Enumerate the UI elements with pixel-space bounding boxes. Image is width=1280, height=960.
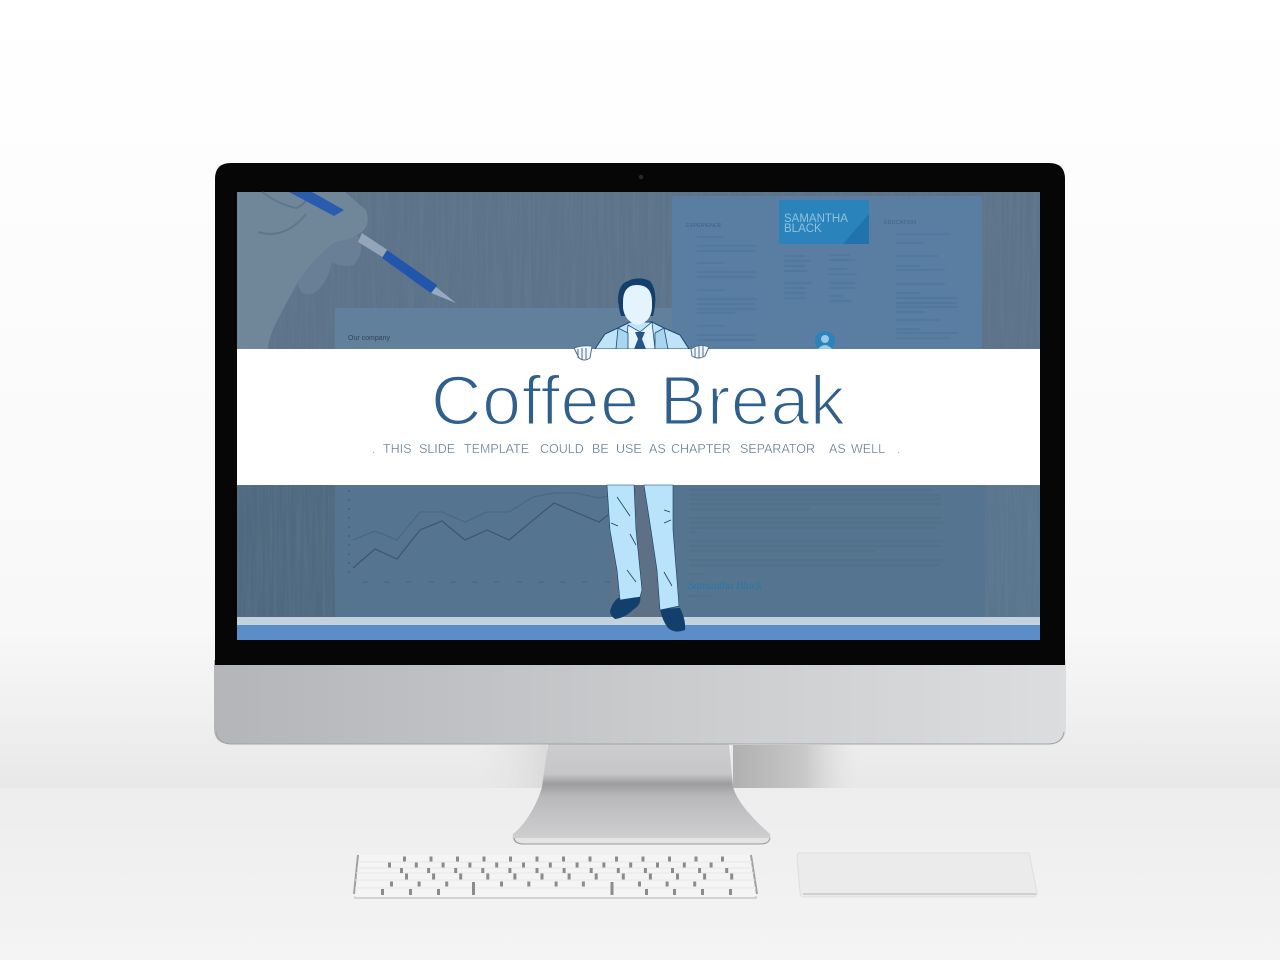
palm and thumb xyxy=(237,192,368,349)
key row lines xyxy=(355,862,756,888)
keyboard xyxy=(354,855,757,899)
signature: Samantha Black xyxy=(688,578,763,592)
shirt xyxy=(626,322,655,349)
jacket xyxy=(595,322,689,349)
hair xyxy=(618,278,655,316)
paper: letter lower xyxy=(673,485,985,617)
subtitle: SEPARATOR xyxy=(740,442,815,456)
monitor body xyxy=(214,163,1066,744)
resume blue name card: SAMANTHA xyxy=(784,213,848,225)
subtitle: . xyxy=(897,442,900,456)
subtitle: AS xyxy=(829,442,846,456)
avatar icon xyxy=(815,331,835,351)
paper: company report upper xyxy=(335,308,675,349)
pen xyxy=(289,192,344,216)
subtitle: TEMPLATE xyxy=(464,442,529,456)
webcam xyxy=(639,175,643,179)
wood lower left xyxy=(237,485,335,617)
resume blue name card xyxy=(779,200,869,244)
wood texture xyxy=(237,192,1040,349)
subtitle: SLIDE xyxy=(419,442,455,456)
line chart xyxy=(349,490,610,582)
resume paper: EDUCATION xyxy=(884,220,916,226)
subtitle: WELL xyxy=(851,442,885,456)
photo: hand holding pen xyxy=(237,192,456,349)
wood gap between papers xyxy=(634,485,673,617)
subtitle: COULD xyxy=(540,442,584,456)
businessman legs and shoes xyxy=(607,485,685,632)
slide screen xyxy=(237,192,1040,640)
left shoe xyxy=(610,596,640,619)
letter body text xyxy=(689,490,944,596)
right shoe xyxy=(660,608,685,632)
bezel xyxy=(215,163,1065,665)
left leg xyxy=(607,485,642,600)
wood lower right xyxy=(985,485,1040,617)
paper: company report lower xyxy=(335,485,610,617)
resume paper xyxy=(672,196,982,351)
subtitle: CHAPTER xyxy=(671,442,731,456)
right leg xyxy=(644,485,679,610)
resume headings: EXPERIENCE xyxy=(686,223,722,229)
key gaps xyxy=(381,859,737,895)
"Our company" label: Our company xyxy=(348,335,391,342)
title: Coffee Break xyxy=(431,362,846,440)
tie xyxy=(634,332,646,349)
businessman figure: upper body xyxy=(595,278,689,349)
bottom stripes xyxy=(237,617,1040,625)
trouser creases xyxy=(611,497,672,586)
subtitle: . xyxy=(372,442,375,456)
subtitle: AS xyxy=(649,442,666,456)
resume blue name card: BLACK xyxy=(784,223,822,235)
subtitle: THIS xyxy=(383,442,411,456)
subtitle: USE xyxy=(616,442,642,456)
fingers behind xyxy=(298,232,361,294)
businessman hands xyxy=(574,345,709,360)
monitor stand xyxy=(513,744,770,844)
trackpad xyxy=(797,853,1037,897)
white title band xyxy=(237,349,1040,485)
subtitle: BE xyxy=(592,442,609,456)
face xyxy=(623,285,652,325)
chin xyxy=(214,660,1066,744)
resume text lines xyxy=(697,234,958,340)
